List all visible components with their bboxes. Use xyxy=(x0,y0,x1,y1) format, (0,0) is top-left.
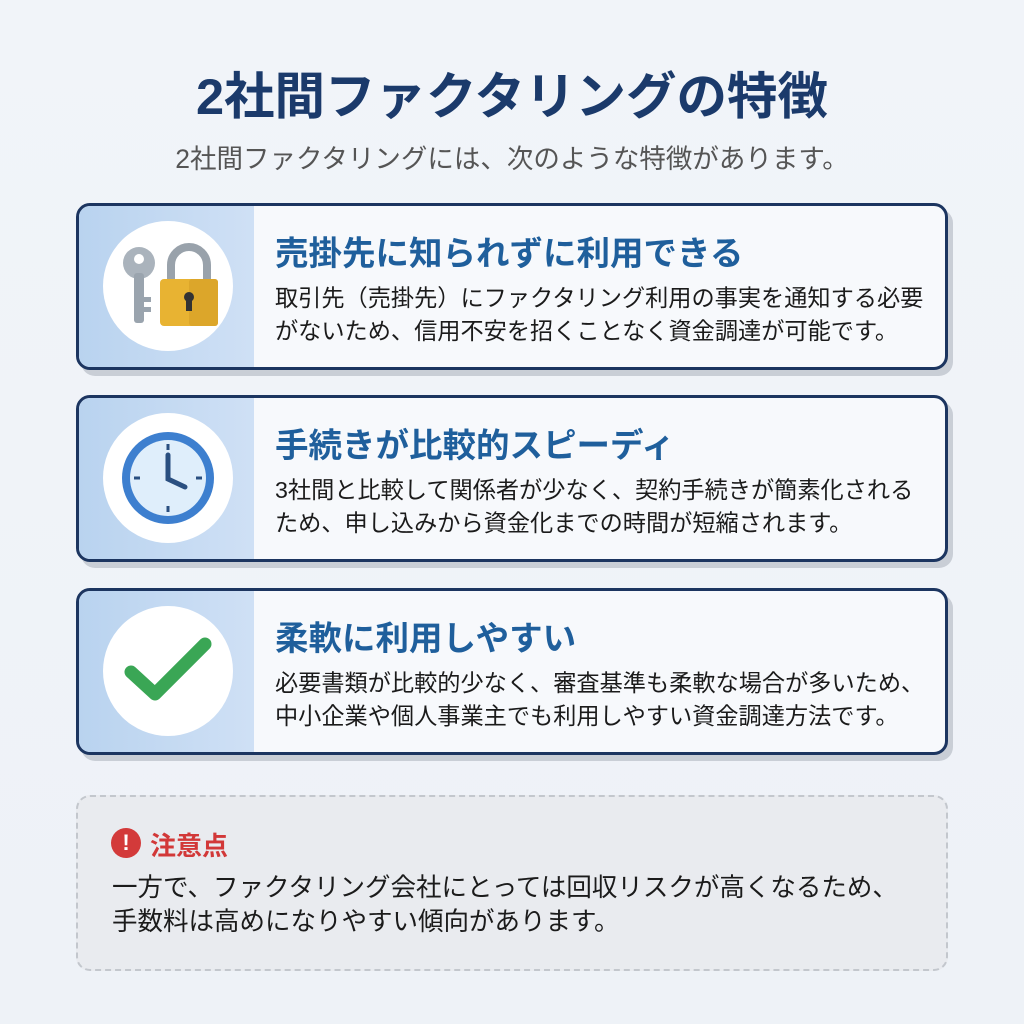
icon: warning: ! xyxy=(122,830,130,855)
body xyxy=(275,477,913,536)
body xyxy=(275,670,924,729)
heading: 売掛先に知られずに利用できる xyxy=(275,236,743,273)
card: speed xyxy=(76,395,948,562)
icon: check xyxy=(103,606,233,736)
body: 取引先（売掛先）にファクタリング利用の事実を通知する必要 xyxy=(275,285,923,311)
icon: clock xyxy=(103,413,233,543)
body xyxy=(275,285,923,344)
note body xyxy=(112,874,898,936)
icon: key and lock xyxy=(103,221,233,351)
note panel xyxy=(76,795,948,971)
note body: 一方で、ファクタリング会社にとっては回収リスクが高くなるため、 xyxy=(112,874,898,902)
card: flexible xyxy=(76,588,948,755)
heading: 手続きが比較的スピーディ xyxy=(275,428,675,465)
heading: 柔軟に利用しやすい xyxy=(275,621,576,658)
body: 必要書類が比較的少なく、審査基準も柔軟な場合が多いため、 xyxy=(275,670,924,696)
icon: warning xyxy=(111,828,141,858)
note body: 手数料は高めになりやすい傾向があります。 xyxy=(112,908,619,936)
body: がないため、信用不安を招くことなく資金調達が可能です。 xyxy=(275,318,898,344)
title: 2社間ファクタリングの特徴 xyxy=(196,68,828,125)
subtitle: 2社間ファクタリングには、次のような特徴があります。 xyxy=(175,144,849,174)
body: 3社間と比較して関係者が少なく、契約手続きが簡素化される xyxy=(275,477,913,503)
body: 中小企業や個人事業主でも利用しやすい資金調達方法です。 xyxy=(275,703,899,729)
card: no notice xyxy=(76,203,948,370)
body: ため、申し込みから資金化までの時間が短縮されます。 xyxy=(275,510,852,536)
note heading: 注意点 xyxy=(150,831,228,861)
